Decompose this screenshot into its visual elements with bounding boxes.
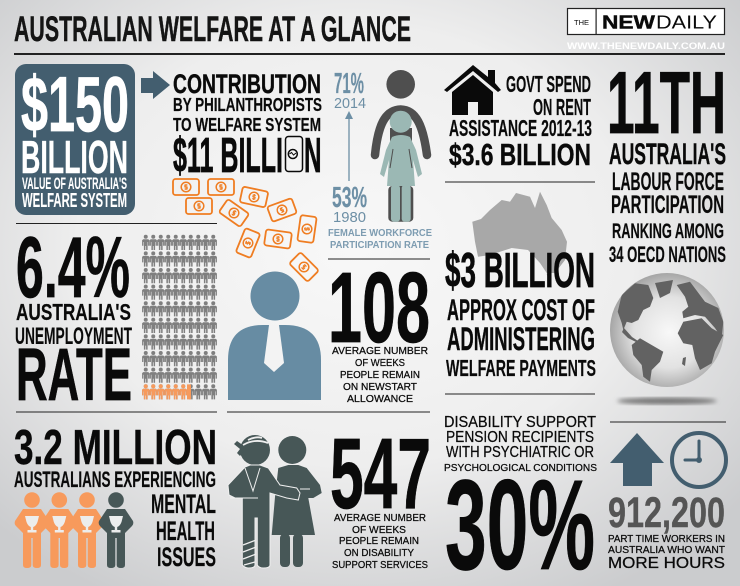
panel: 3.2 million mental health: HEALTH [156,516,215,546]
panel: $3 billion: APPROX COST OF [447,294,595,327]
panel: 547 weeks disability: PEOPLE REMAIN [339,535,419,547]
panel: 30% disability support pension: DISABILITY SUPPORT [444,414,596,431]
chart: female workforce participation: 1980 [333,209,366,226]
panel: government rent assistance: ON RENT [533,94,591,120]
title: AUSTRALIAN WELFARE AT A GLANCE [14,10,411,49]
chart: female workforce participation: PARTICIPATION RATE [330,239,429,251]
panel: 30% disability support pension: PENSION RECIPIENTS [446,429,594,446]
text block: contribution by philanthropists: CONTRIBUTION [173,69,321,99]
chart: pictogram of 100 people [142,235,217,399]
panel: government rent assistance: $3.6 BILLION [449,137,591,172]
icon: up arrow [610,433,664,486]
icon: woman and girl [375,70,427,222]
text block: contribution by philanthropists: BY PHILANTHROPISTS [173,95,322,115]
chart: female workforce participation: 71% [334,68,364,100]
text block: contribution by philanthropists: TO WELFARE SYSTEM [173,114,321,135]
panel: $150 billion: VALUE OF AUSTRALIA'S [22,175,127,193]
icon: injured man and carer [228,435,322,568]
icon: clock [672,433,726,487]
panel: 547 weeks disability: AVERAGE NUMBER [334,512,426,524]
panel: 108 weeks newstart: ON NEWSTART [343,381,418,393]
chart: female workforce participation: 2014 [334,95,366,112]
logo: The New Daily: THE [574,18,589,27]
panel: 11th labour force [607,53,726,267]
panel: 108 weeks newstart: ALLOWANCE [347,393,413,405]
chart: female workforce participation [328,68,432,251]
panel: 108 weeks newstart: PEOPLE REMAIN [340,369,420,381]
icon: businessman [228,272,321,400]
panel: $150 billion: WELFARE SYSTEM [22,190,127,212]
icon: Australia map [472,192,567,280]
panel: $3 billion [445,244,596,381]
panel: $3 billion: ADMINISTERING [447,321,595,357]
panel: 6.4% unemployment: RATE [16,333,132,416]
panel: government rent assistance: GOVT SPEND [506,71,591,97]
icon: four people, three orange one grey [15,492,133,568]
icon: phone-shaped letter O [286,136,302,172]
panel: 30% disability support pension: PSYCHOLOGICAL CONDITIONS [444,462,597,474]
arrow [141,71,170,99]
icon: house [444,65,501,115]
icon: globe [610,273,724,404]
panel: 547 weeks disability: OF WEEKS [352,524,406,536]
panel: 6.4% unemployment: 6.4% [16,220,130,316]
panel: 912,200 part time workers: PART TIME WORKERS IN [608,533,725,545]
panel: 108 weeks newstart [328,252,430,405]
logo: The New Daily: DAILY [656,12,717,32]
panel: $3 billion: $3 BILLION [445,244,595,298]
panel: 6.4% unemployment: UNEMPLOYMENT [15,323,132,350]
panel: 3.2 million mental health [14,421,217,572]
panel: government rent assistance [444,65,592,172]
panel: 30% disability support pension: WITH PSYCHIATRIC OR [446,444,594,461]
panel: $150 billion [15,60,135,215]
panel: 912,200 part time workers: MORE HOURS [608,555,725,572]
logo: The New Daily: NEW [602,12,655,32]
text block: contribution by philanthropists: $11 BILLI [173,129,283,183]
chart: female workforce participation: FEMALE WORKFORCE [328,227,432,239]
text block: contribution by philanthropists: N [304,129,322,183]
panel: government rent assistance: ASSISTANCE 2012-13 [449,115,592,141]
panel: 30% disability support pension [444,414,597,586]
panel: 912,200 part time workers: AUSTRALIA WHO WANT [608,544,726,556]
logo: The New Daily: WWW.THENEWDAILY.COM.AU [567,41,725,52]
panel: 3.2 million mental health: ISSUES [157,542,216,572]
panel: 547 weeks disability [330,418,431,571]
panel: 912,200 part time workers [608,433,726,572]
panel: 108 weeks newstart: AVERAGE NUMBER [332,345,428,357]
chart: female workforce participation: 53% [332,182,367,214]
panel: 3.2 million mental health: 3.2 MILLION [14,421,217,475]
panel: $3 billion: WELFARE PAYMENTS [446,355,596,381]
panel: 547 weeks disability: SUPPORT SERVICES [332,559,428,571]
panel: 3.2 million mental health: AUSTRALIANS EXPERIENCING [14,467,216,492]
panel: $150 billion: $150 [21,60,129,148]
icon: falling money notes [173,179,319,282]
logo: The New Daily [567,8,725,52]
panel: 108 weeks newstart: 108 [328,252,430,364]
panel: 6.4% unemployment [15,220,217,416]
panel: 6.4% unemployment: AUSTRALIA'S [16,299,131,325]
panel: 108 weeks newstart: OF WEEKS [355,357,405,369]
text block: contribution by philanthropists [173,69,322,183]
panel: 3.2 million mental health: MENTAL [151,489,216,519]
panel: $150 billion: BILLION [21,131,128,183]
panel: 547 weeks disability: 547 [330,418,431,530]
panel: 547 weeks disability: ON DISABILITY [344,547,414,559]
